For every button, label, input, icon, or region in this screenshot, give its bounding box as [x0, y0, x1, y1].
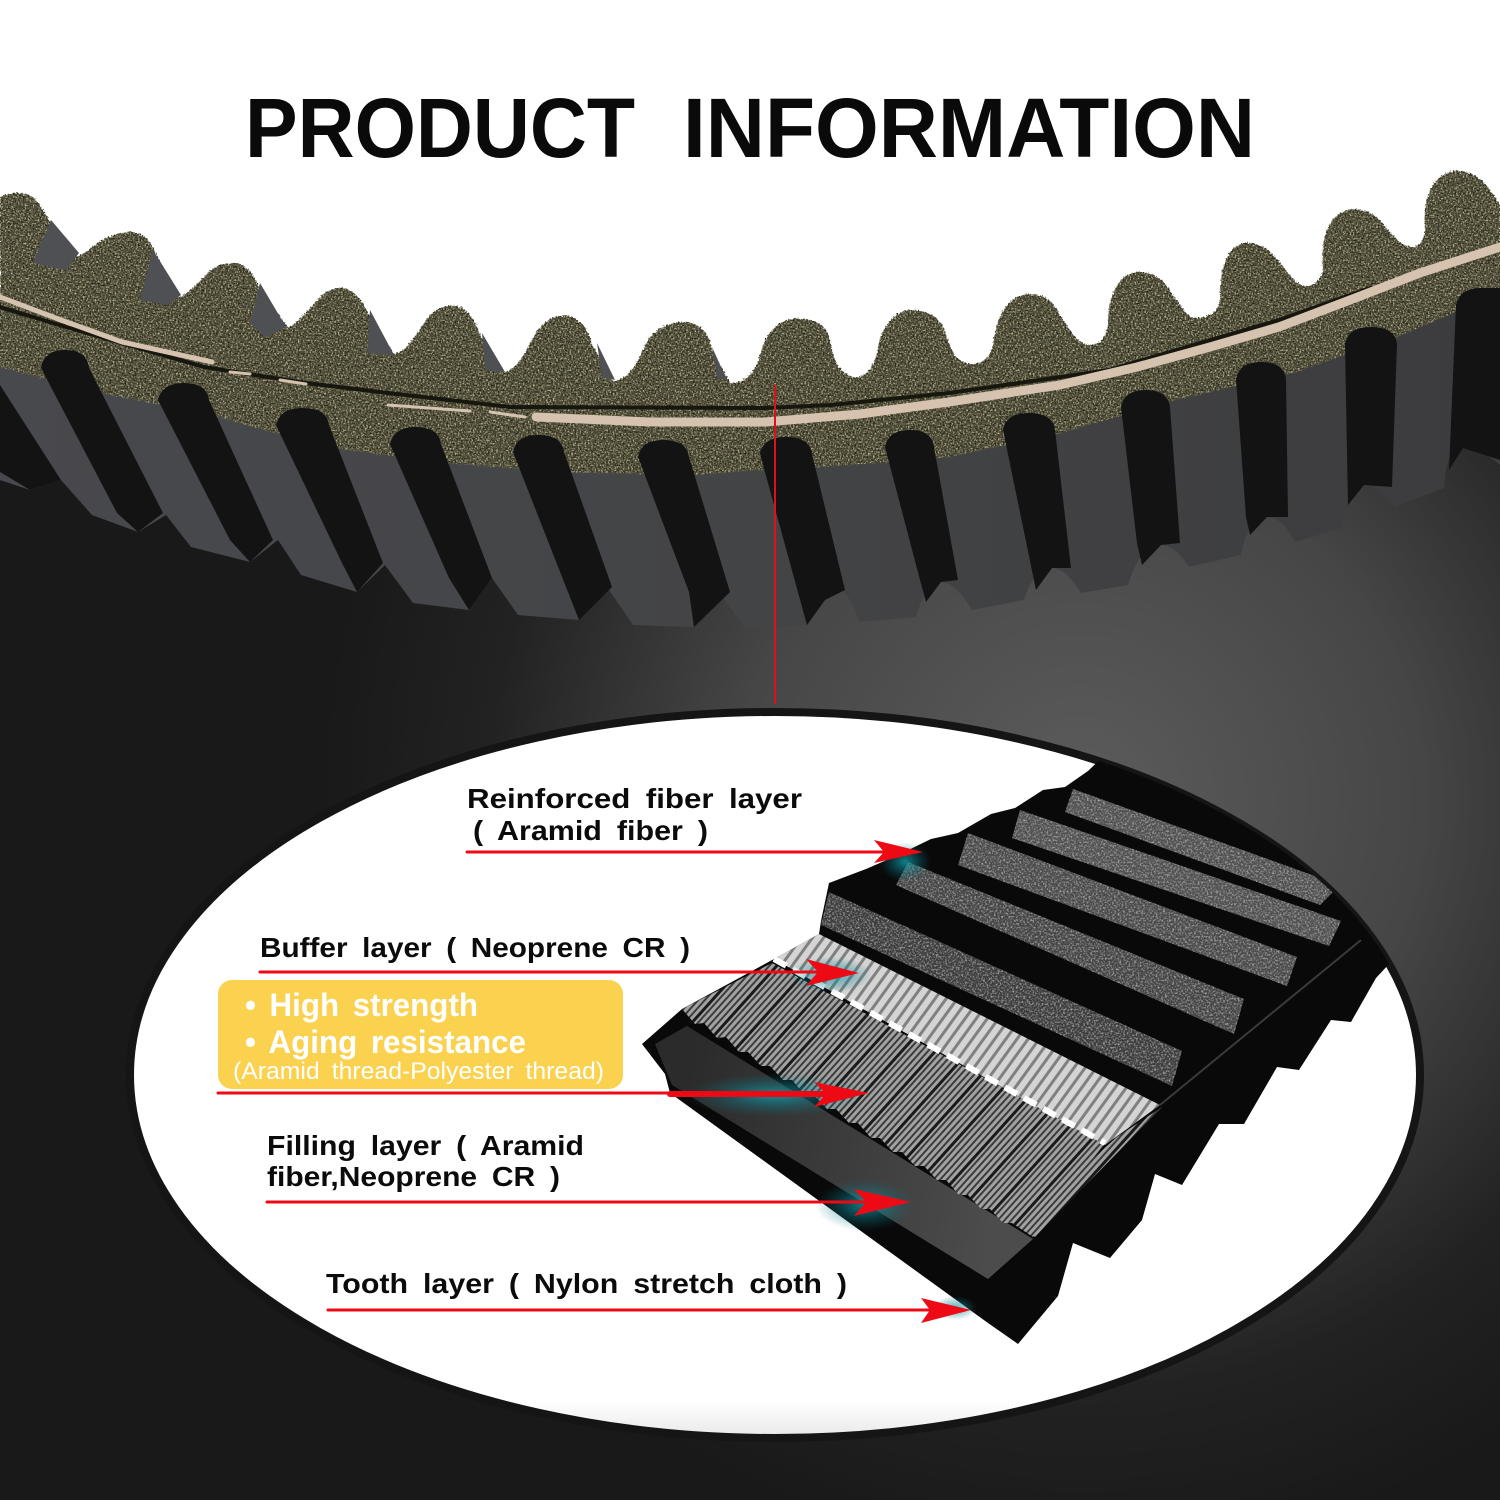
- title: INFORMATION: [683, 81, 1255, 175]
- label: filling layer: Filling layer ( Aramid: [267, 1130, 584, 1161]
- tooth slots in the dark rubber: [0, 288, 1500, 627]
- side thread strip: [1034, 1107, 1162, 1237]
- belt photo: [0, 171, 1500, 628]
- label: reinforced fiber layer: [467, 783, 802, 846]
- callout: yellow feature box: • Aging resistance: [245, 1024, 526, 1060]
- arrow: tooth layer: [328, 1298, 971, 1323]
- belt side edge: [1160, 940, 1361, 1105]
- white top background: [0, 0, 1500, 430]
- magnified ellipse panel: [130, 712, 1420, 1438]
- ridge faces: [821, 789, 1341, 1086]
- arrow: reinforced fiber layer: [467, 840, 923, 863]
- title: [245, 81, 1255, 175]
- arrow: filling layer: [267, 1189, 911, 1216]
- label: reinforced fiber layer: Reinforced fiber layer: [467, 783, 802, 814]
- red vertical leader line: [774, 385, 776, 704]
- label: filling layer: [267, 1130, 584, 1192]
- seam: cream cord: [0, 247, 1500, 422]
- label: filling layer: fiber,Neoprene CR ): [267, 1161, 560, 1192]
- title: PRODUCT: [245, 81, 635, 175]
- black belt silhouette: [642, 750, 1430, 1344]
- label: buffer layer: Buffer layer ( Neoprene CR ): [260, 932, 690, 963]
- arrow glows: [685, 842, 977, 1320]
- belt dark rubber body with teeth: [0, 270, 1500, 628]
- callout: yellow feature box: (Aramid thread-Polyester thread): [233, 1058, 604, 1085]
- belt olive fabric layer: [0, 171, 1500, 475]
- arrow: buffer layer: [260, 959, 859, 986]
- belt cross-section illustration: [642, 750, 1430, 1344]
- aramid light fiber layer: [774, 934, 1160, 1145]
- label: tooth layer: Tooth layer ( Nylon stretch cloth ): [326, 1268, 847, 1299]
- callout: yellow feature box: • High strength: [245, 987, 478, 1023]
- filling layer: [655, 1026, 1033, 1279]
- label: reinforced fiber layer: ( Aramid fiber ): [473, 815, 708, 846]
- callout: yellow feature box: [218, 980, 623, 1089]
- arrow: aramid polyester thread: [218, 1082, 869, 1107]
- polyester thread layer: [682, 963, 1105, 1237]
- white dashes along layer boundary: [774, 959, 1105, 1143]
- seam: black gap line: [0, 287, 1373, 408]
- gray tooth side wedges: [33, 220, 727, 380]
